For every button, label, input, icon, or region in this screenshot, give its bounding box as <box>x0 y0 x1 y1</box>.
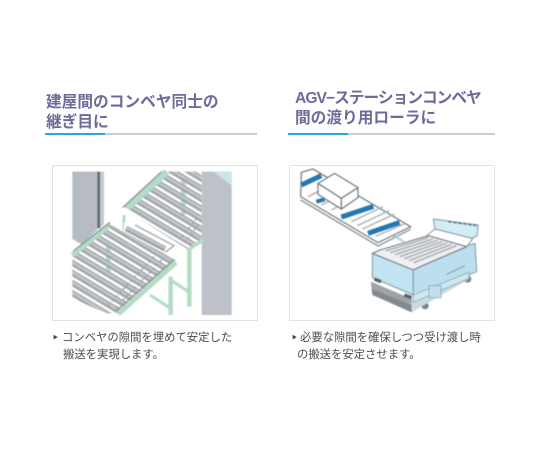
joint: gap roller bridge <box>124 222 174 253</box>
heading: left <box>46 93 219 131</box>
AGV base <box>371 272 469 312</box>
AGV tower <box>427 219 478 247</box>
bullet text: right <box>292 331 481 361</box>
wall: right building <box>202 172 232 315</box>
bullet text: right: の搬送を安定させます。 <box>297 349 421 361</box>
wall: left building <box>72 172 104 244</box>
conveyor: station roller line <box>301 169 411 246</box>
arrow: transfer direction <box>393 236 404 242</box>
heading: left: 建屋間のコンベヤ同士の <box>46 94 219 111</box>
heading: right: 間の渡り用ローラに <box>295 110 436 127</box>
AGV body <box>372 243 477 302</box>
panel: right image frame <box>289 165 495 321</box>
illustration: conveyor-to-conveyor joint <box>70 169 232 316</box>
frame: green legs <box>124 215 203 315</box>
bullet text: left: 搬送を実現します。 <box>63 349 164 361</box>
vehicle: AGV <box>371 219 478 312</box>
bullet text: left: ▶ コンベヤの隙間を埋めて安定した <box>53 332 232 344</box>
bullet text: right: ▶ 必要な隙間を確保しつつ受け渡し時 <box>292 332 481 344</box>
heading rule: right <box>288 133 495 135</box>
panel: left image frame <box>52 165 258 321</box>
bullet text: left <box>53 331 232 361</box>
AGV roller deck <box>372 236 467 270</box>
AGV wheels <box>421 275 471 309</box>
conveyor: lower roller section <box>72 222 176 314</box>
heading rule: left <box>45 133 257 135</box>
conveyor: upper roller section <box>123 172 202 249</box>
heading: right <box>295 90 481 127</box>
heading: right: AGV−ステーションコンベヤ <box>295 90 481 107</box>
box on conveyor <box>318 173 358 209</box>
heading: left: 継ぎ目に <box>46 114 109 131</box>
